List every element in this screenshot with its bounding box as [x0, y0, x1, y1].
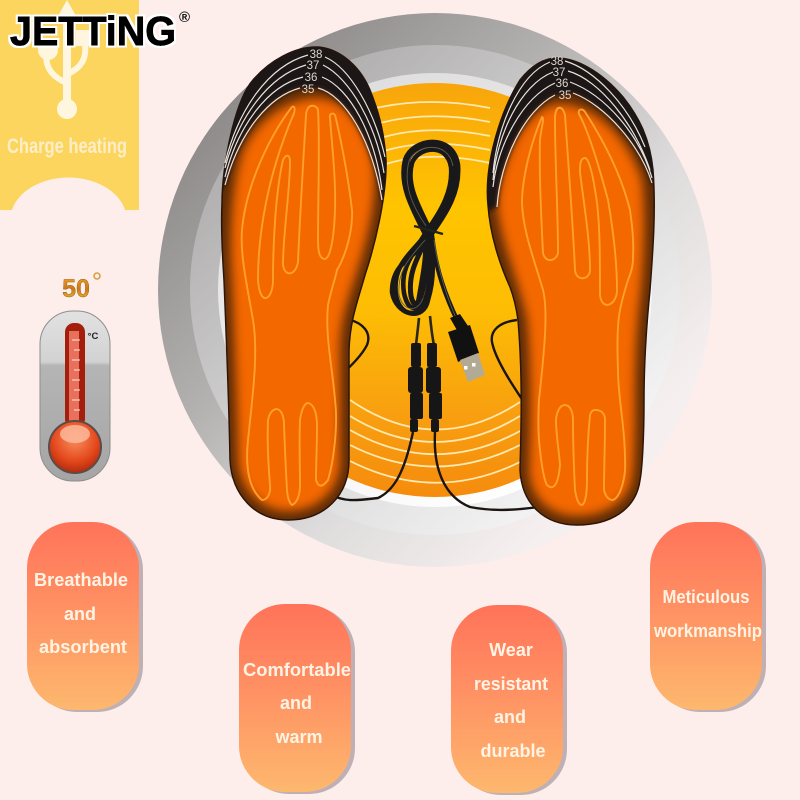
size numbers: 38 — [310, 49, 322, 61]
heating wire — [242, 106, 352, 505]
pill text: workmanship — [653, 621, 762, 641]
panel: meticulous workmanship — [650, 522, 766, 712]
size numbers: 35 — [302, 84, 314, 96]
yellow heat circle — [228, 83, 642, 497]
size numbers — [551, 56, 571, 102]
left insole — [215, 40, 395, 520]
cable highlights — [399, 147, 456, 318]
pill text: resistant — [474, 674, 548, 694]
dc connector left — [408, 343, 423, 432]
heating wire — [522, 108, 633, 505]
pill text: Comfortable — [243, 660, 351, 680]
panel: comfortable and warm — [239, 604, 355, 794]
size numbers — [302, 49, 322, 96]
size numbers: 37 — [307, 60, 319, 72]
orange heated area — [231, 98, 375, 511]
usb heating cable — [392, 142, 485, 432]
pill text: and — [494, 707, 526, 727]
mercury tube — [65, 323, 85, 428]
thermometer — [40, 273, 110, 481]
bulb — [49, 421, 101, 473]
concentric background circles — [158, 13, 712, 567]
pill text: absorbent — [39, 637, 127, 657]
size numbers: 36 — [556, 78, 568, 90]
pill text: warm — [274, 727, 323, 747]
size numbers: 35 — [559, 90, 571, 102]
temperature value: 50 — [62, 275, 90, 303]
size marks — [493, 61, 652, 207]
heat wave arcs bottom — [350, 400, 520, 483]
icon: usb symbol — [38, 0, 92, 119]
pill text — [34, 570, 128, 657]
usb plug — [448, 314, 485, 382]
size numbers: 38 — [551, 56, 563, 68]
panel: wear resistant and durable — [451, 605, 567, 795]
size numbers: 36 — [305, 72, 317, 84]
pill text — [653, 587, 762, 641]
sole body — [222, 47, 386, 520]
pill text: durable — [480, 741, 546, 761]
side cable loops — [330, 320, 552, 510]
size numbers: 37 — [553, 67, 565, 79]
tube ticks — [72, 340, 80, 410]
black toe cap — [223, 47, 386, 202]
panel: breathable and absorbent — [27, 522, 143, 712]
pill text: Wear — [489, 640, 533, 660]
degree mark — [94, 273, 100, 279]
brand logo: ® — [179, 9, 190, 26]
bulb shine — [60, 425, 90, 443]
thermometer case — [40, 311, 110, 481]
pill text: Meticulous — [662, 587, 750, 607]
pill text — [474, 640, 548, 761]
heat wave arcs top — [376, 102, 490, 164]
cable tie — [414, 226, 443, 234]
pill text — [243, 660, 351, 747]
panel: charge heating — [0, 0, 139, 210]
black toe cap — [488, 58, 654, 214]
sole body — [487, 58, 654, 525]
size marks — [225, 55, 385, 200]
coiled cable bundle — [392, 142, 458, 322]
dc connector right — [426, 343, 442, 432]
orange heated area — [497, 104, 644, 516]
pill text: and — [64, 604, 96, 624]
brand logo: JETTiNG — [10, 8, 176, 54]
pill text: and — [280, 693, 312, 713]
dc connector leads — [416, 316, 434, 345]
celsius mark: °C — [88, 331, 98, 342]
right insole — [486, 56, 655, 526]
yellow notched banner — [0, 0, 139, 210]
pill text: Breathable — [34, 570, 128, 590]
charge heating label: Charge heating — [7, 135, 127, 158]
